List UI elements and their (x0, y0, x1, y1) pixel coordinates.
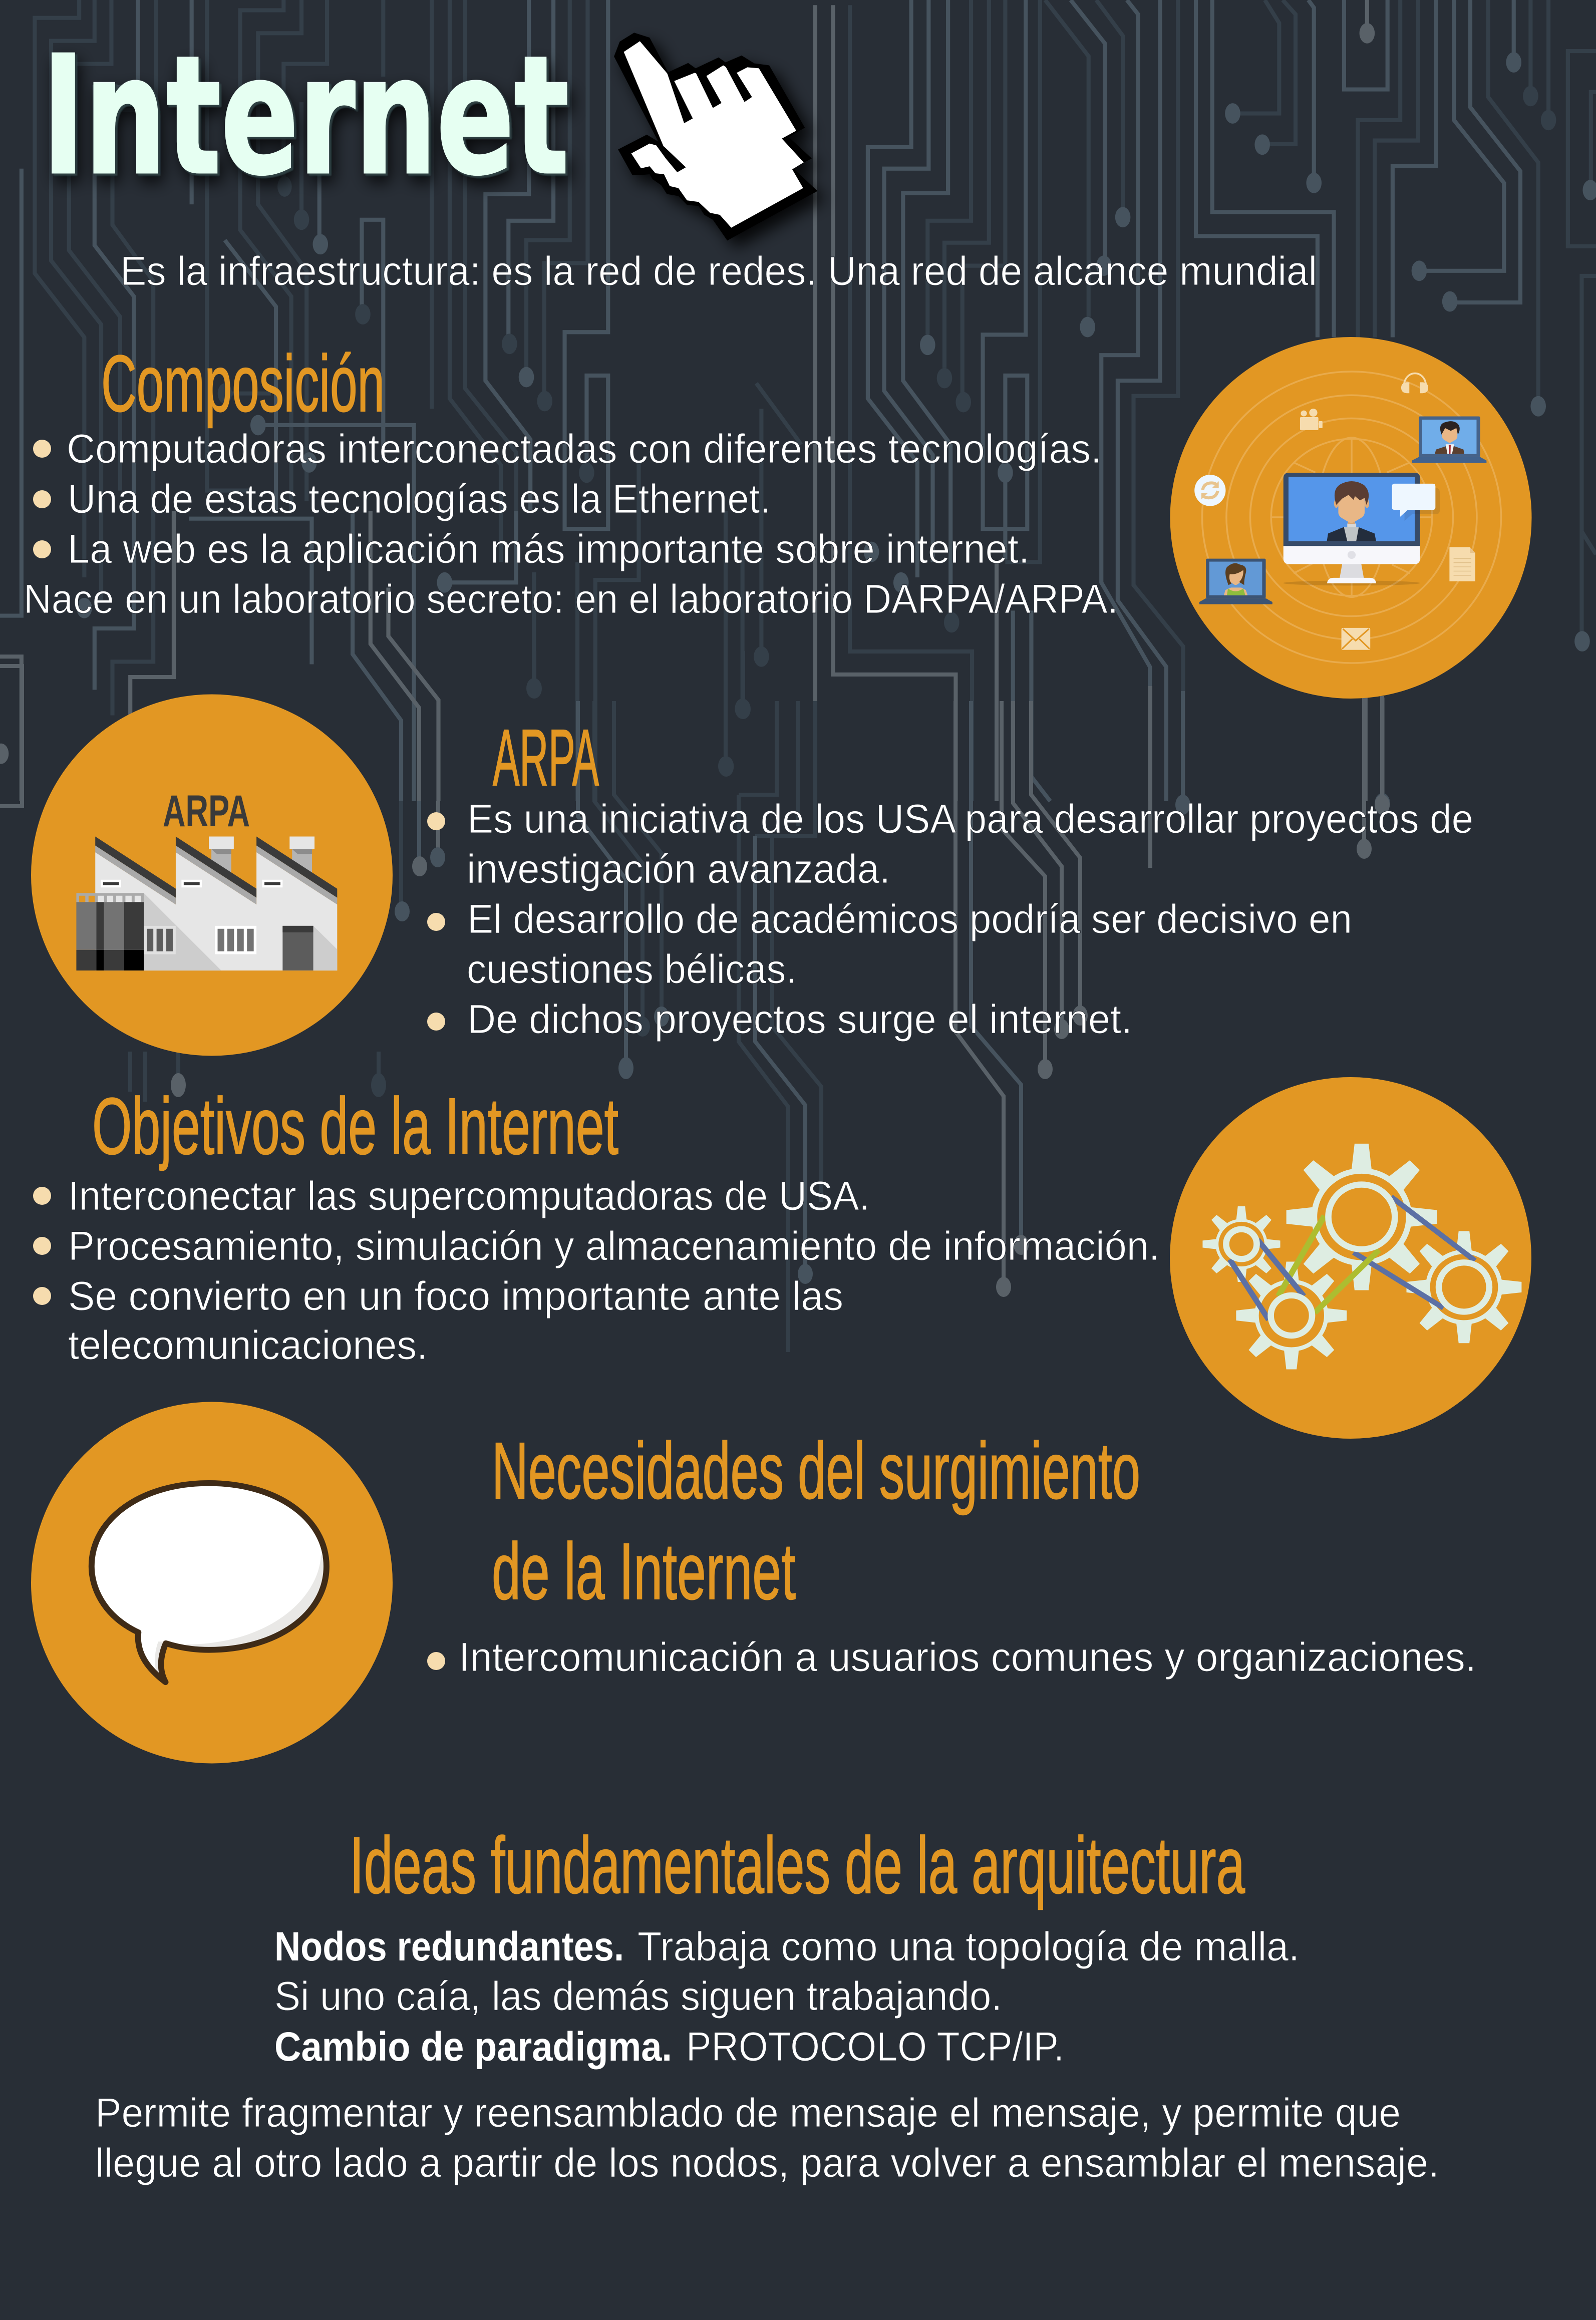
text block: Ideas: Permite fragmentar y reensamblado de mensaje el mensaje, y permite que (95, 2090, 1401, 2136)
refresh icon (1194, 475, 1225, 506)
circuit board traces, middle (0, 651, 1390, 1352)
icon: speech bubble circle (31, 1402, 393, 1764)
icon: global network circle (1170, 337, 1531, 699)
text block: Ideas: Nodos redundantes. (274, 1924, 624, 1969)
circuit board traces, upper left (0, 0, 801, 801)
icon: ARPA factory circle (31, 694, 393, 1056)
icon: gears circle (1170, 1077, 1531, 1439)
laptop left (1199, 559, 1272, 604)
heading: Necesidades: de la Internet (492, 1526, 796, 1616)
heading: Necesidades: Necesidades del surgimiento (492, 1426, 1140, 1515)
title: Internet (42, 21, 569, 211)
heading: Necesidades (492, 1426, 1140, 1616)
icon: pixel hand cursor (614, 33, 817, 240)
intro text: Es la infraestructura: es la red de redes. Una red de alcance mundial (120, 248, 1317, 294)
text block: ARPA list: De dichos proyectos surge el internet. (467, 997, 1132, 1042)
headphones icon (1401, 373, 1428, 393)
text block: ARPA list (427, 796, 1473, 1042)
text block: Ideas: Cambio de paradigma. (274, 2024, 672, 2070)
text block: Objetivos list: telecomunicaciones. (68, 1322, 428, 1368)
document icon (1449, 547, 1475, 581)
text block: Composición list: La web es la aplicación más importante sobre internet. (68, 526, 1030, 572)
text block: Ideas: Trabaja como una topología de malla. (637, 1924, 1300, 1969)
heading: ARPA: ARPA (493, 713, 599, 802)
heading: Objetivos: Objetivos de la Internet (92, 1081, 618, 1171)
text block: Objetivos list: Se convierto en un foco importante ante las (68, 1273, 843, 1319)
text block: Ideas: llegue al otro lado a partir de los nodos, para volver a ensamblar el mensaje. (95, 2140, 1439, 2186)
text block: Objetivos list: Procesamiento, simulación y almacenamiento de información. (68, 1223, 1160, 1269)
text block: Composición list: Nace en un laboratorio secreto: en el laboratorio DARPA/ARPA. (24, 576, 1118, 622)
text block: Composición list: Computadoras interconectadas con diferentes tecnologías. (67, 426, 1102, 472)
text block: ARPA list: investigación avanzada. (467, 846, 890, 892)
text block: ARPA list: El desarrollo de académicos podría ser decisivo en (467, 896, 1352, 942)
text block: Composición list: Una de estas tecnologías es la Ethernet. (68, 476, 771, 522)
text block: Ideas: Si uno caía, las demás siguen trabajando. (274, 1973, 1002, 2019)
envelope icon (1342, 628, 1370, 650)
text block: Ideas (95, 1924, 1439, 2186)
text block: Objetivos list: Interconectar las supercomputadoras de USA. (68, 1173, 870, 1219)
text block: ARPA list: cuestiones bélicas. (467, 946, 797, 992)
text block: Objetivos list (33, 1173, 1160, 1368)
text block: ARPA list: Es una iniciativa de los USA para desarrollar proyectos de (467, 796, 1473, 842)
text block: Composición list (24, 426, 1118, 622)
circuit board traces, upper right (815, 0, 1596, 813)
heading: Composición: Composición (101, 339, 385, 428)
camera icon (1300, 409, 1323, 430)
text block: Ideas: PROTOCOLO TCP/IP. (686, 2024, 1064, 2070)
text block: Necesidades list: Intercomunicación a usuarios comunes y organizaciones. (459, 1634, 1476, 1680)
laptop right (1412, 417, 1486, 463)
icon: ARPA factory circle: ARPA (163, 786, 250, 836)
